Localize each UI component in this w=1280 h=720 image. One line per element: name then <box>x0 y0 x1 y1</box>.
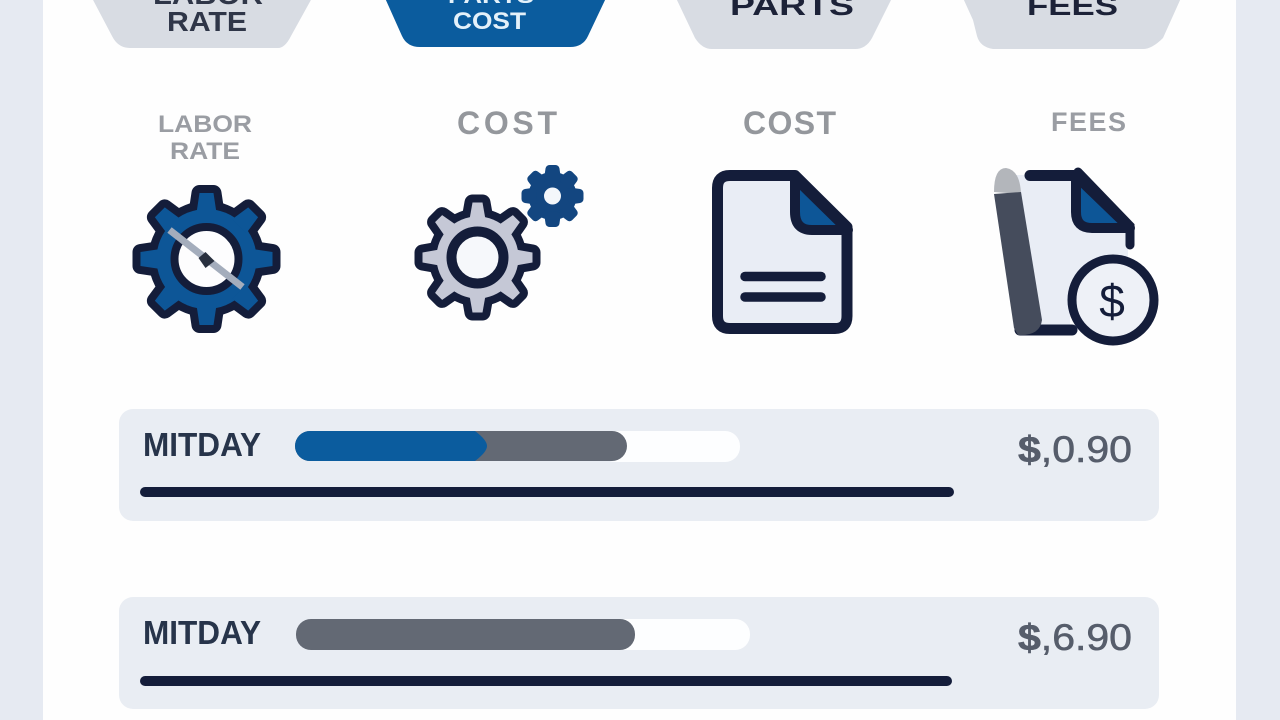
dollar coin <box>1072 259 1154 341</box>
heading: cost: COST <box>457 105 557 141</box>
icon: grey gear with small blue gear <box>422 169 580 312</box>
tab: parts cost (active): COST <box>453 8 526 35</box>
icon: document <box>718 176 848 328</box>
progress bar <box>295 431 740 462</box>
heading: fees: FEES <box>1051 107 1126 137</box>
heading: labor rate <box>158 111 252 165</box>
tab: labor rate: RATE <box>167 6 247 37</box>
row label: MITDAY <box>143 426 261 463</box>
baseline rule <box>140 487 954 497</box>
heading: labor rate: RATE <box>170 138 240 165</box>
icon: fee document with pen and dollar coin <box>994 168 1154 341</box>
panel: first time row <box>119 409 1159 521</box>
large grey gear <box>422 202 532 312</box>
pen <box>994 168 1021 194</box>
icon: fee document with pen and dollar coin: $ <box>1099 275 1125 327</box>
tab: fees <box>963 0 1181 49</box>
tab: labor rate <box>92 0 312 48</box>
value: $,6.90 <box>1018 617 1132 658</box>
tab: parts <box>676 0 892 49</box>
icon: blue gear with gauge <box>140 193 272 325</box>
heading: cost second column: COST <box>743 105 836 141</box>
small blue gear <box>526 169 580 223</box>
progress bar <box>296 619 750 650</box>
baseline rule <box>140 676 952 686</box>
row label: MITDAY <box>143 614 261 651</box>
heading: labor rate: LABOR <box>158 111 252 138</box>
value: $,0.90 <box>1018 429 1132 470</box>
panel: second time row <box>119 597 1159 709</box>
tab: parts cost (active) <box>385 0 606 47</box>
